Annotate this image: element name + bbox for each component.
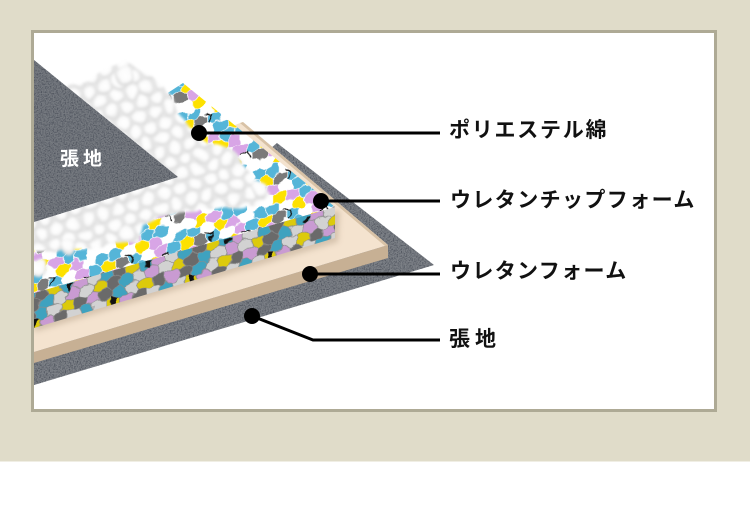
- fabric label: 張地: [60, 148, 106, 170]
- leader: upholstery fabric: [244, 308, 440, 340]
- label: urethane chip foam: ウレタンチップフォーム: [450, 189, 696, 212]
- layer: polyester cotton: [26, 62, 270, 277]
- layer: bottom upholstery fabric: [34, 143, 434, 385]
- label: urethane foam: ウレタンフォーム: [450, 260, 628, 283]
- layered material illustration: [14, 60, 434, 385]
- leader: urethane foam: [302, 266, 440, 282]
- leader: polyester cotton: [191, 125, 440, 141]
- layer: top upholstery fabric: [34, 60, 178, 222]
- label: upholstery fabric: 張地: [449, 328, 501, 351]
- leader: urethane chip foam: [313, 193, 440, 209]
- shadow under chip block: [34, 210, 340, 332]
- label: polyester cotton: ポリエステル綿: [449, 119, 608, 142]
- layer: urethane foam: [34, 122, 388, 363]
- layer: urethane chip foam: [34, 83, 335, 328]
- white panel: [32, 32, 716, 410]
